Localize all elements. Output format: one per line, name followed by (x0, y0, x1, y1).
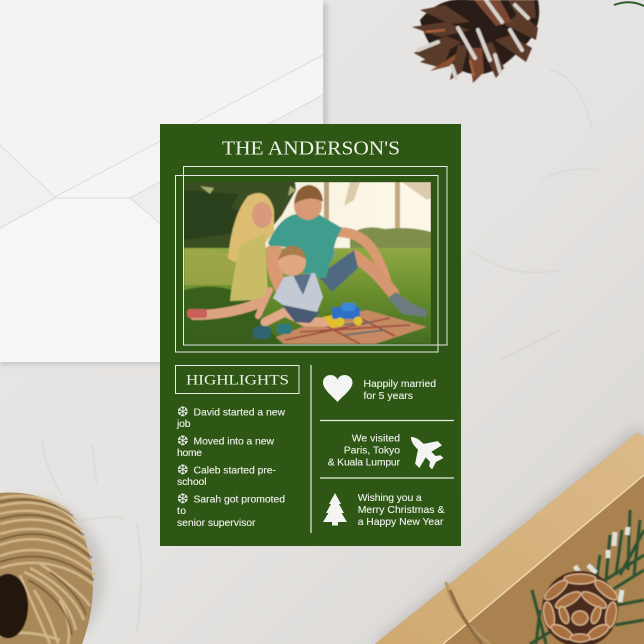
icon: christmas tree (323, 493, 347, 526)
man's arm and legs (337, 232, 387, 285)
item: Moved: Moved into a new (194, 436, 274, 448)
item: Moved: home (177, 448, 202, 459)
item: Sarah: Sarah got promoted (194, 494, 285, 506)
icon: heart (323, 375, 352, 402)
twine ball (0, 493, 105, 644)
ball behind man (330, 248, 335, 262)
woman's hair (228, 193, 274, 263)
toy truck (323, 315, 342, 328)
evergreen sprig: bottom right (530, 510, 644, 644)
greeting card panel (160, 124, 461, 546)
text: travel (328, 434, 401, 468)
text: travel: Paris, Tokyo (344, 446, 400, 456)
envelope (0, 0, 328, 365)
child's head (278, 254, 307, 276)
woman's face (252, 202, 272, 228)
item: David: job (176, 419, 191, 430)
item: Sarah: to (177, 506, 186, 517)
text: happily married: for 5 years (364, 391, 413, 402)
text: wishes: a Happy New Year (358, 517, 444, 528)
item: Moved (177, 434, 274, 459)
family photo (184, 182, 431, 344)
item: Sarah: senior supervisor (177, 518, 256, 529)
item: Sarah: ❆ (177, 492, 189, 508)
man's shorts (318, 250, 358, 292)
child's shirt (273, 273, 323, 312)
item: Moved: ❆ (177, 434, 189, 450)
icon: airplane (400, 426, 449, 475)
item: Sarah (177, 492, 285, 529)
column divider (310, 365, 312, 533)
pine cone: bottom right (542, 571, 620, 644)
text: happily married: Happily married (364, 379, 436, 390)
woman's dress (230, 234, 268, 301)
highlights heading box: HIGHLIGHTS (186, 372, 289, 388)
evergreen sprig: top right (614, 2, 644, 6)
text: wishes (358, 493, 444, 528)
child's shorts (282, 305, 320, 323)
separator (320, 420, 454, 478)
item: David: David started a new (194, 408, 285, 418)
title: THE ANDERSON'S (222, 138, 400, 160)
text: wishes: Wishing you a (358, 493, 422, 504)
child's legs (265, 312, 330, 322)
man's shirt (268, 214, 342, 278)
item: Caleb: Caleb started pre- (194, 466, 276, 476)
text: travel: & Kuala Lumpur (328, 458, 401, 468)
item: David (176, 404, 285, 430)
twine on parcel (446, 582, 490, 644)
text: travel: We visited (352, 434, 400, 444)
woman's leg (194, 302, 262, 315)
item: David: ❆ (177, 404, 189, 420)
pine cone: top (412, 0, 539, 83)
text: wishes: Merry Christmas & (358, 505, 444, 516)
double photo frame (176, 166, 447, 352)
item: Caleb: ❆ (177, 462, 189, 478)
highlights list (176, 404, 285, 529)
text: happily married (364, 379, 436, 402)
item: Caleb (177, 462, 276, 488)
kraft paper parcel (370, 425, 644, 644)
item: Caleb: school (177, 477, 206, 488)
highlights heading box (176, 366, 299, 394)
man's head (294, 198, 322, 221)
picnic blanket (276, 310, 427, 344)
